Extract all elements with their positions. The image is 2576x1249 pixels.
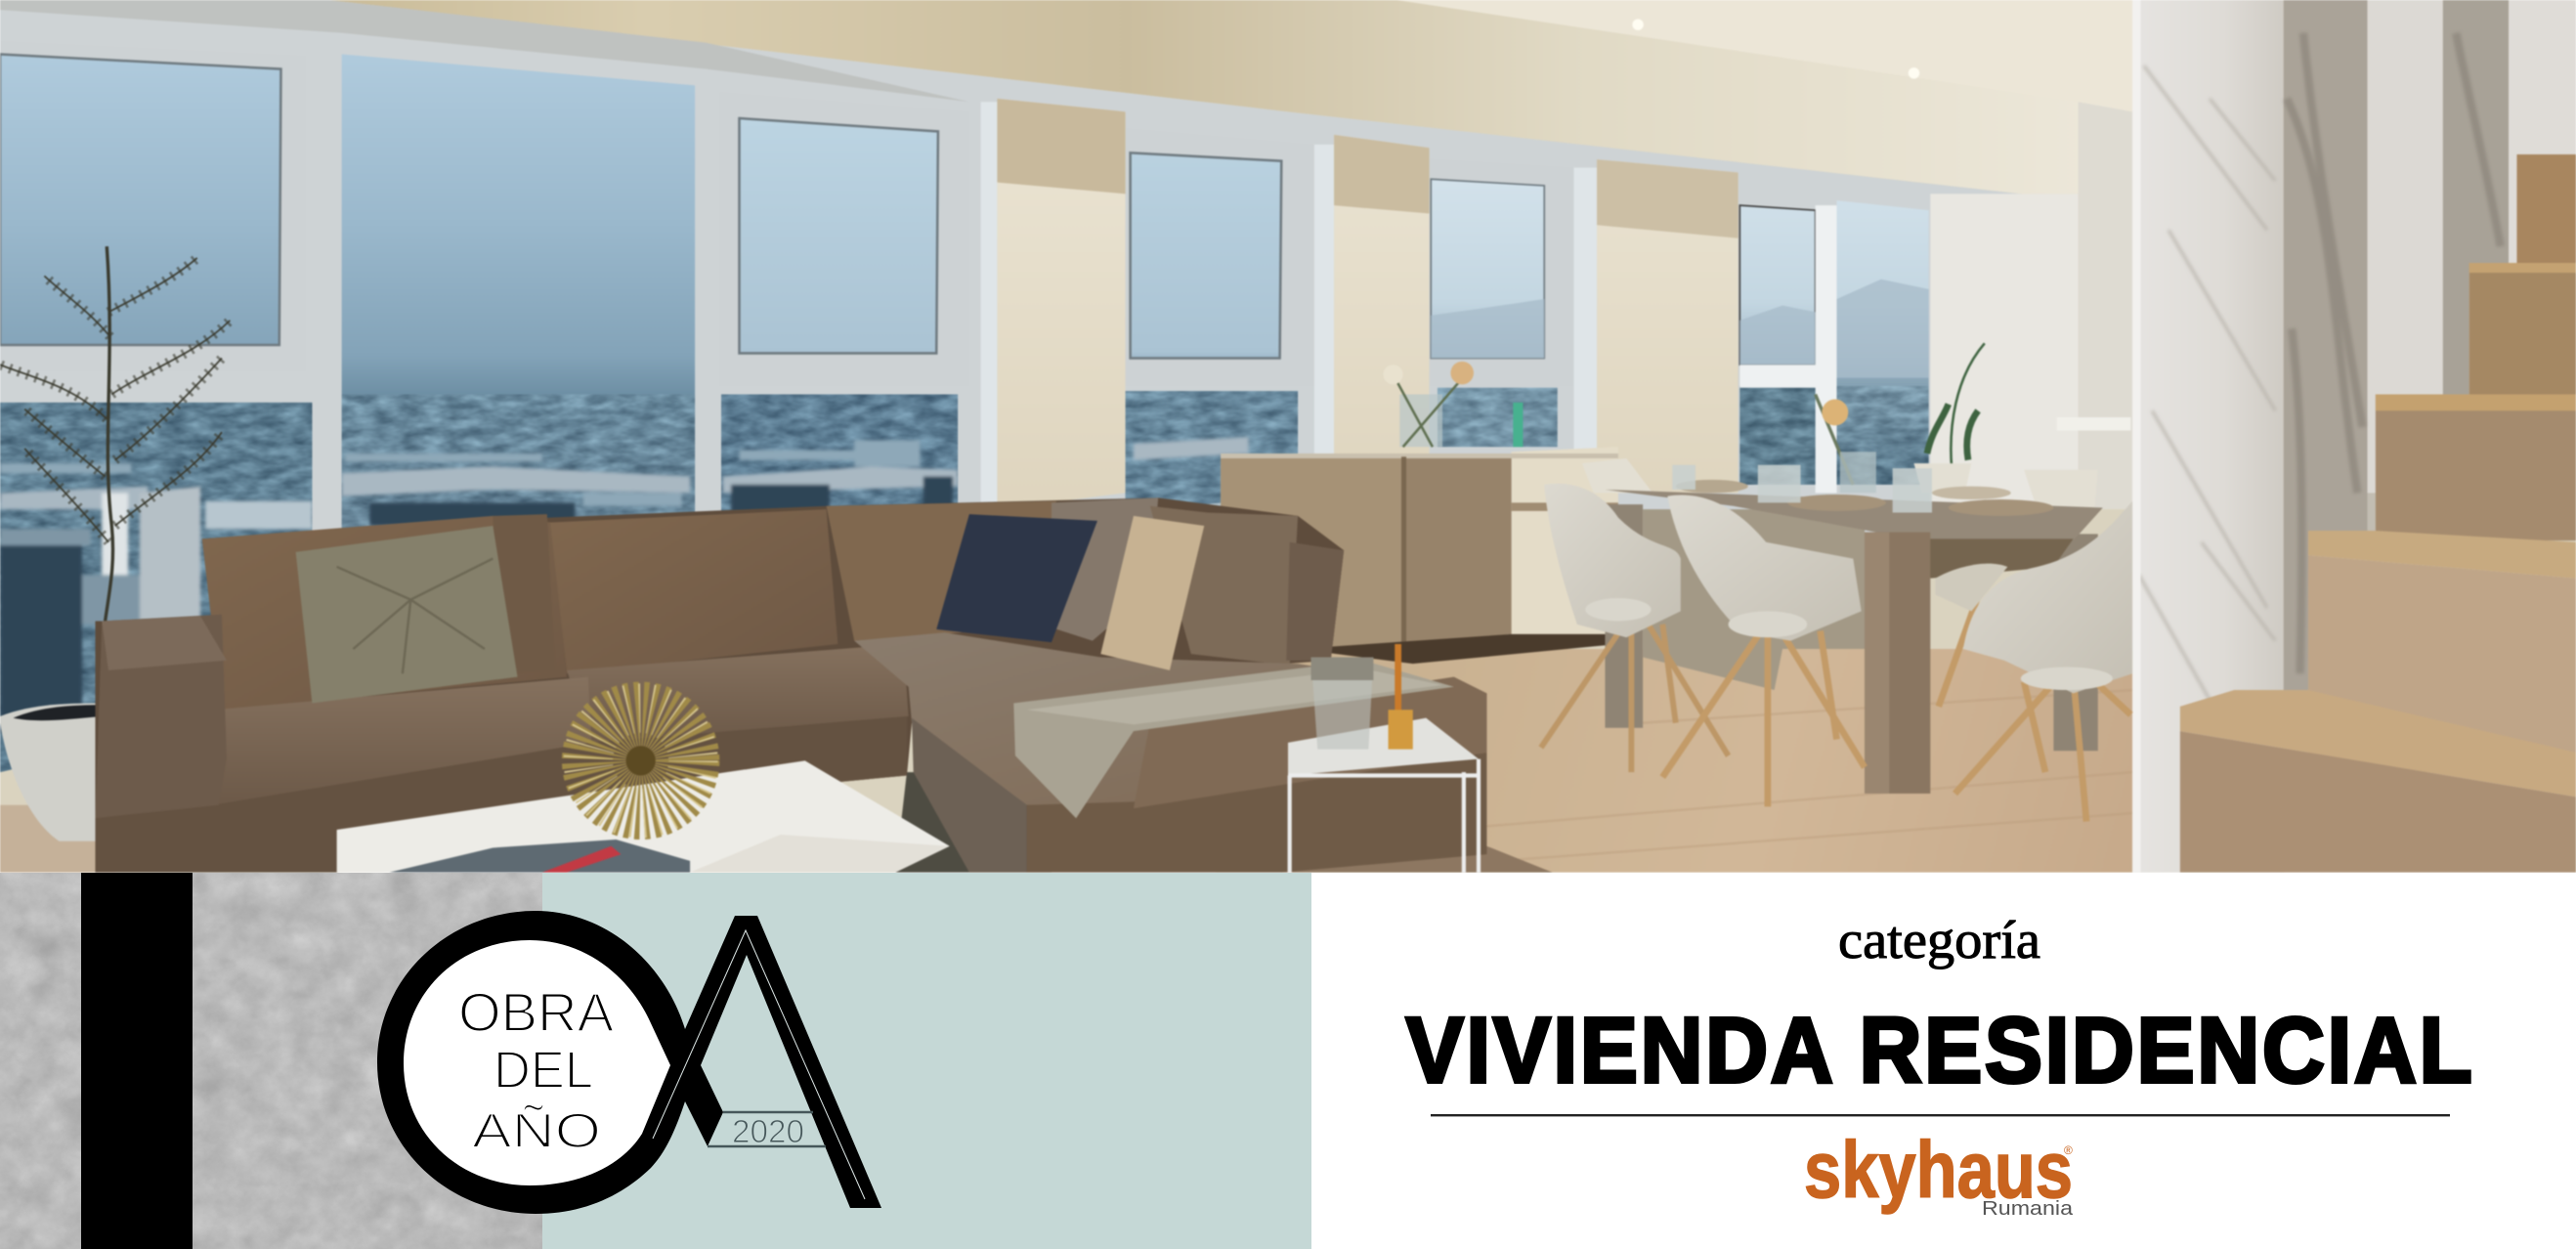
logo wordmark: DEL [494, 1041, 593, 1099]
olive tree [0, 246, 230, 707]
side table with glass vase [1288, 644, 1479, 873]
city texture [0, 386, 1939, 781]
logo wordmark [458, 981, 615, 1158]
back dining chairs [1582, 458, 2098, 509]
ceiling lights [1632, 20, 1919, 79]
wall plant [1927, 343, 1985, 468]
category text block [1403, 910, 2472, 1220]
logo emblem: O and A mark [377, 911, 881, 1214]
black vertical bar [81, 873, 193, 1249]
coffee table with magazine [337, 760, 950, 873]
place settings and glasses [1672, 465, 2053, 516]
logo year box [708, 1112, 826, 1149]
marble column and stair wall [2132, 0, 2576, 873]
gold sphere ornament [588, 709, 693, 813]
white category panel [1311, 873, 2576, 1249]
throw blanket [1013, 661, 1454, 818]
windows with sky and city view [0, 41, 1939, 781]
sofa [96, 497, 1486, 873]
sofa pillows [296, 514, 1204, 704]
white dining chairs [1541, 484, 2132, 822]
distant mountains [1431, 280, 1929, 378]
photo: living and dining room interior [0, 0, 2576, 873]
logo: Skyhaus Rumania: Rumania [1982, 1198, 2074, 1220]
logo wordmark: AÑO [472, 1103, 601, 1158]
ceiling and beam [0, 0, 2576, 873]
concrete panel [0, 873, 542, 1249]
label: categoría: categoría [1838, 910, 2040, 969]
logo: Obra del Año 2020 [377, 911, 881, 1214]
sideboard [1221, 447, 1618, 664]
planter [0, 704, 102, 841]
logo: Skyhaus Rumania: skyhaus [1804, 1126, 2073, 1215]
heading: Vivienda Residencial: VIVIENDA RESIDENCIAL [1406, 999, 2472, 1102]
floor [0, 649, 2132, 873]
walls between windows [981, 99, 2132, 509]
rug under sofa [895, 772, 1052, 873]
logo wordmark: OBRA [458, 981, 615, 1043]
logo year box: 2020 [732, 1113, 804, 1149]
logo: Skyhaus Rumania: ® [2064, 1143, 2073, 1157]
wooden stairs [2180, 154, 2576, 873]
vases and flowers on sideboard [1384, 362, 1876, 493]
dining table [1605, 490, 2103, 794]
teal panel [542, 873, 1311, 1249]
divider [1431, 1114, 2450, 1116]
